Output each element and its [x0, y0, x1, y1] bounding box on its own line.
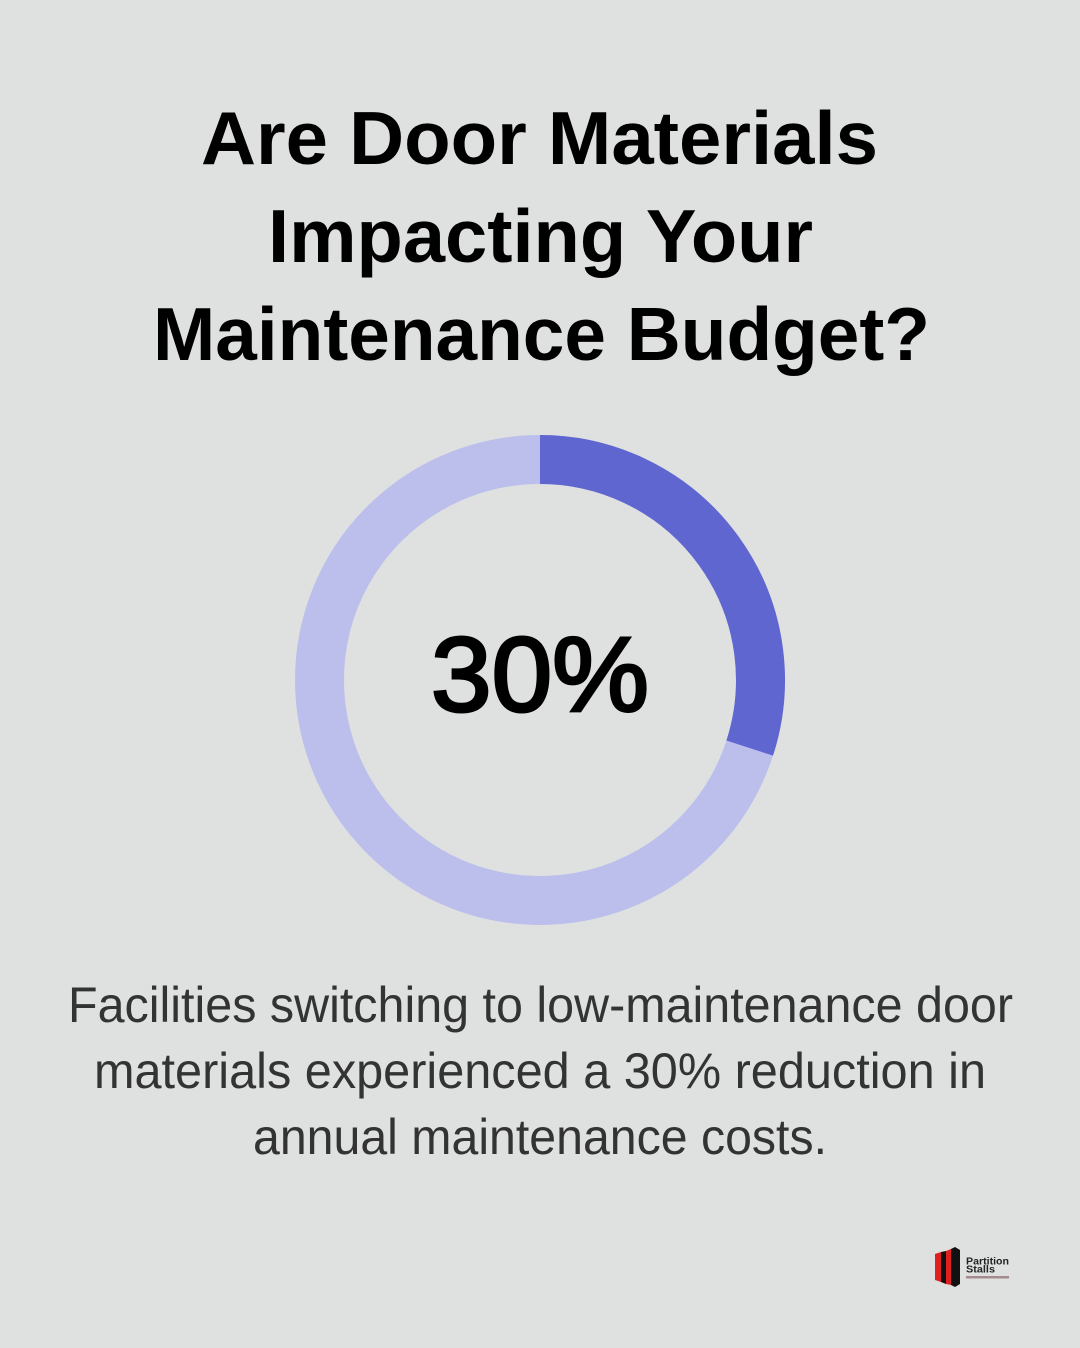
- title: Maintenance Budget?: [153, 292, 930, 376]
- ring segment: 30%: [540, 460, 760, 748]
- description text: materials experienced a 30% reduction in: [94, 1043, 986, 1099]
- title: Impacting Your: [268, 194, 813, 278]
- description text: annual maintenance costs.: [253, 1109, 827, 1165]
- logo wordmark: Stalls: [966, 1264, 995, 1276]
- title: Are Door Materials: [201, 96, 878, 180]
- logo wordmark: [966, 1256, 1009, 1276]
- icon: partition doors: [935, 1247, 960, 1287]
- title: [153, 96, 930, 376]
- description text: Facilities switching to low-maintenance door: [68, 977, 1013, 1033]
- logo: Partition Stalls: [935, 1247, 1009, 1287]
- description text: [68, 977, 1013, 1165]
- logo tagline bar: [966, 1276, 1009, 1278]
- donut value: 30%: [431, 616, 649, 734]
- ring track: remaining 70%: [320, 460, 760, 900]
- logo wordmark: Partition: [966, 1256, 1009, 1268]
- donut chart: 30%: [320, 460, 760, 900]
